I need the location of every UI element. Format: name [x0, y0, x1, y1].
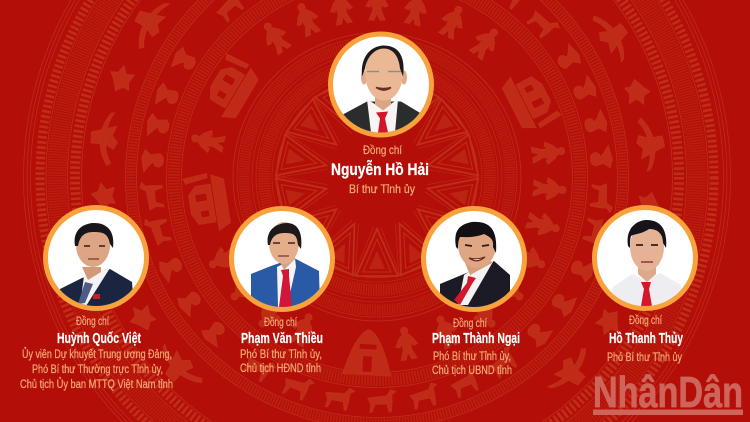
- label: Đồng chí: Đồng chí: [453, 318, 488, 330]
- panel: Nguyễn Hồ Hải: [328, 32, 434, 196]
- panel: Huỳnh Quốc Việt: [20, 205, 173, 391]
- panel: Hồ Thanh Thủy: [592, 205, 698, 364]
- role: Phó Bí thư Tỉnh ủy, Chủ tịch HĐND tỉnh: [240, 349, 322, 375]
- name: Phạm Thành Ngại: Phạm Thành Ngại: [432, 331, 520, 347]
- portrait: Hồ Thanh Thủy: [592, 205, 698, 311]
- portrait: Phạm Thành Ngại: [421, 206, 527, 312]
- role: Ủy viên Dự khuyết Trung ương Đảng, Phó Bí thư Thường trực Tỉnh ủy, Chủ tịch Ủy ban MTTQ Việt Nam tỉnh: Ủy viên Dự khuyết Trung ương Đảng,: [22, 348, 172, 361]
- role: Phó Bí thư Tỉnh ủy, Chủ tịch UBND tỉnh: Phó Bí thư Tỉnh ủy,: [433, 351, 511, 363]
- name: Phạm Văn Thiều: Phạm Văn Thiều: [241, 331, 323, 347]
- portrait: Phạm Văn Thiều: [229, 206, 335, 312]
- panel: Phạm Văn Thiều: [229, 206, 335, 375]
- role: Ủy viên Dự khuyết Trung ương Đảng, Phó Bí thư Thường trực Tỉnh ủy, Chủ tịch Ủy ban MTTQ Việt Nam tỉnh: [20, 348, 173, 391]
- name: Nguyễn Hồ Hải: Nguyễn Hồ Hải: [331, 160, 429, 179]
- role: Ủy viên Dự khuyết Trung ương Đảng, Phó Bí thư Thường trực Tỉnh ủy, Chủ tịch Ủy ban MTTQ Việt Nam tỉnh: Chủ tịch Ủy ban MTTQ Việt Nam tỉnh: [20, 378, 173, 391]
- label: Đồng chí: Đồng chí: [264, 317, 298, 329]
- role: Phó Bí thư Tỉnh ủy, Chủ tịch UBND tỉnh: [432, 351, 512, 377]
- label: Đồng chí: Đồng chí: [363, 143, 403, 157]
- panel: Phạm Thành Ngại: [421, 206, 527, 377]
- role: Phó Bí thư Tỉnh ủy, Chủ tịch HĐND tỉnh: Phó Bí thư Tỉnh ủy,: [240, 349, 322, 361]
- role: Phó Bí thư Tỉnh ủy, Chủ tịch HĐND tỉnh: Chủ tịch HĐND tỉnh: [240, 363, 321, 375]
- portrait: Nguyễn Hồ Hải: [328, 32, 434, 138]
- label: Đồng chí: Đồng chí: [629, 315, 663, 327]
- role: Phó Bí thư Tỉnh ủy, Chủ tịch UBND tỉnh: Chủ tịch UBND tỉnh: [432, 365, 512, 377]
- portrait: Huỳnh Quốc Việt: [43, 205, 149, 311]
- role: Ủy viên Dự khuyết Trung ương Đảng, Phó Bí thư Thường trực Tỉnh ủy, Chủ tịch Ủy ban MTTQ Việt Nam tỉnh: Phó Bí thư Thường trực Tỉnh ủy,: [32, 364, 163, 376]
- role: Bí thư Tỉnh ủy: Bí thư Tỉnh ủy: [349, 182, 415, 196]
- name: Huỳnh Quốc Việt: Huỳnh Quốc Việt: [57, 331, 141, 347]
- label: Đồng chí: Đồng chí: [76, 316, 110, 328]
- role: Phó Bí thư Tỉnh ủy: Phó Bí thư Tỉnh ủy: [607, 352, 682, 364]
- name: Hồ Thanh Thủy: Hồ Thanh Thủy: [609, 331, 683, 347]
